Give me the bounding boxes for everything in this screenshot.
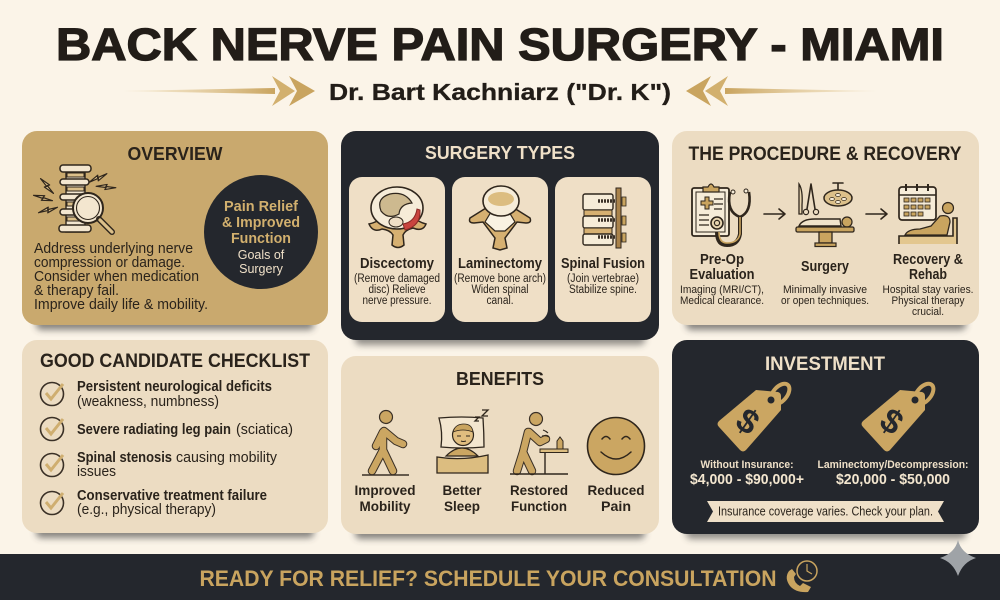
text: pre-op evaluation: Evaluation — [690, 267, 754, 283]
text: call to action: READY FOR RELIEF? SCHEDULE YOUR CONSULTATION — [200, 566, 776, 591]
icon: sparkle watermark — [940, 540, 976, 576]
text: laminectomy: Laminectomy — [458, 255, 543, 272]
text: recovery and rehab: Rehab — [909, 267, 947, 283]
text: laminectomy — [454, 255, 546, 307]
text: surgery step — [781, 259, 869, 307]
text: discectomy: disc) Relieve — [368, 284, 426, 296]
footer band — [0, 554, 1000, 600]
text: price laminectomy: $20,000 - $50,000 — [836, 472, 950, 488]
text: benefit labels: Reduced — [588, 482, 644, 498]
text: pre-op evaluation: Pre-Op — [700, 252, 744, 268]
text: benefit labels: Restored — [510, 482, 568, 498]
text: pre-op evaluation: Imaging (MRI/CT), — [680, 284, 764, 296]
text: criterion four — [77, 488, 267, 518]
heading: investment: INVESTMENT — [765, 354, 885, 375]
arrow: step one to two — [764, 209, 785, 219]
text: spinal fusion: (Join vertebrae) — [567, 273, 639, 285]
panel: investment — [672, 340, 979, 539]
heading: procedure and recovery: THE PROCEDURE & RECOVERY — [688, 144, 962, 165]
text: surgery step: or open techniques. — [781, 295, 869, 307]
icon: check three — [40, 454, 64, 476]
card: discectomy — [349, 177, 445, 322]
text: surgery step: Minimally invasive — [783, 284, 867, 296]
text: price without insurance: Without Insurance: — [700, 459, 794, 471]
text: criterion two: (sciatica) — [236, 422, 293, 438]
text: pre-op evaluation: Medical clearance. — [680, 295, 764, 307]
card: laminectomy — [452, 177, 548, 322]
arrow: left ornament — [122, 76, 315, 106]
arrow: step two to three — [866, 209, 887, 219]
text: criterion three — [77, 450, 278, 480]
text: price laminectomy — [818, 459, 968, 488]
text: criterion one: (weakness, numbness) — [77, 394, 219, 410]
text: discectomy: Discectomy — [360, 255, 435, 272]
text: benefit labels: Improved — [354, 482, 416, 498]
text: spinal fusion: Spinal Fusion — [561, 255, 645, 272]
panel: procedure and recovery — [672, 131, 979, 330]
subtitle: Dr. Bart Kachniarz ("Dr. K") — [329, 79, 671, 105]
text: recovery and rehab — [882, 252, 974, 318]
icon: check two — [40, 418, 64, 440]
text: laminectomy: (Remove bone arch) — [454, 273, 546, 285]
callout: insurance ribbon — [707, 501, 944, 522]
text: spinal fusion — [561, 255, 645, 296]
icon: calendar and resting patient — [899, 184, 957, 244]
panel: good candidate checklist — [22, 340, 328, 538]
text: benefit labels: Better — [442, 482, 482, 498]
text: criterion three: Spinal stenosis — [77, 450, 172, 466]
text: overview body: compression or damage. — [34, 255, 185, 271]
icon: sleeping person — [437, 410, 488, 473]
icon: price tag laminectomy — [862, 380, 937, 452]
text: criterion one — [77, 379, 272, 410]
callout: goals of surgery: Function — [231, 230, 291, 247]
icon: walking person — [362, 410, 409, 475]
heading: benefits: BENEFITS — [456, 369, 544, 389]
icon: price tag without insurance — [718, 380, 793, 452]
callout: goals of surgery: Pain Relief — [224, 198, 299, 215]
panel: overview — [22, 131, 328, 330]
text: benefit labels: Function — [511, 498, 567, 514]
callout: goals of surgery: & Improved — [222, 214, 300, 231]
text: discectomy: nerve pressure. — [362, 295, 432, 307]
icon: laminectomy vertebra — [470, 186, 530, 250]
icon: discectomy vertebra — [369, 187, 426, 248]
panel: surgery types — [341, 131, 659, 345]
callout: goals of surgery: Surgery — [239, 262, 284, 276]
text: price laminectomy: Laminectomy/Decompression: — [818, 459, 968, 471]
text: recovery and rehab: Recovery & — [893, 252, 963, 268]
card: spinal fusion — [555, 177, 651, 322]
panel: benefits — [341, 356, 659, 539]
text: price without insurance: $4,000 - $90,000+ — [690, 472, 804, 488]
heading: overview: OVERVIEW — [128, 144, 222, 164]
text: criterion three: issues — [77, 464, 116, 480]
text: criterion two: Severe radiating leg pain — [77, 422, 231, 438]
icon: spinal fusion hardware — [583, 188, 626, 248]
text: laminectomy: Widen spinal — [472, 284, 528, 296]
text: benefit labels — [354, 482, 644, 514]
heading: surgery types: SURGERY TYPES — [425, 143, 575, 163]
text: recovery and rehab: crucial. — [912, 306, 944, 318]
text: overview body — [34, 241, 208, 313]
text: recovery and rehab: Hospital stay varies. — [882, 284, 974, 296]
text: laminectomy: canal. — [486, 295, 514, 307]
icon: price tag without insurance: $ — [729, 401, 766, 443]
icon: surgical tools and table — [796, 183, 854, 246]
text: criterion four: Conservative treatment failure — [77, 488, 267, 504]
icon: spine with magnifier and pain bolts — [34, 165, 116, 232]
text: recovery and rehab: Physical therapy — [892, 295, 965, 307]
text: benefit labels: Sleep — [444, 498, 480, 514]
text: discectomy: (Remove damaged — [354, 273, 440, 285]
text: price without insurance — [690, 459, 804, 488]
callout: insurance ribbon: Insurance coverage varies. Check your plan. — [718, 504, 933, 518]
text: discectomy — [354, 255, 440, 307]
arrow: right ornament — [686, 76, 878, 106]
text: overview body: Improve daily life & mobility. — [34, 297, 208, 313]
text: benefit labels: Pain — [601, 498, 631, 514]
text: benefit labels: Mobility — [360, 498, 411, 514]
text: overview body: & therapy fail. — [34, 283, 119, 299]
text: pre-op evaluation — [680, 252, 764, 307]
icon: check four — [40, 492, 64, 514]
callout: goals of surgery: Goals of — [238, 248, 285, 262]
text: criterion four: (e.g., physical therapy) — [77, 502, 216, 518]
icon: check one — [40, 382, 64, 406]
icon: clipboard and stethoscope — [692, 184, 750, 245]
title: BACK NERVE PAIN SURGERY - MIAMI — [56, 19, 944, 70]
icon: price tag laminectomy: $ — [873, 401, 910, 443]
icon: smiley face — [588, 418, 644, 474]
icon: phone and clock — [787, 561, 817, 592]
text: spinal fusion: Stabilize spine. — [569, 284, 637, 296]
heading: checklist: GOOD CANDIDATE CHECKLIST — [40, 351, 310, 372]
text: surgery step: Surgery — [801, 259, 849, 275]
callout: goals of surgery — [204, 175, 318, 289]
text: overview body: Address underlying nerve — [34, 241, 193, 257]
text: overview body: Consider when medication — [34, 269, 199, 285]
icon: person at table — [510, 412, 568, 474]
text: criterion one: Persistent neurological deficits — [77, 379, 272, 395]
text: criterion three: causing mobility — [176, 450, 278, 466]
